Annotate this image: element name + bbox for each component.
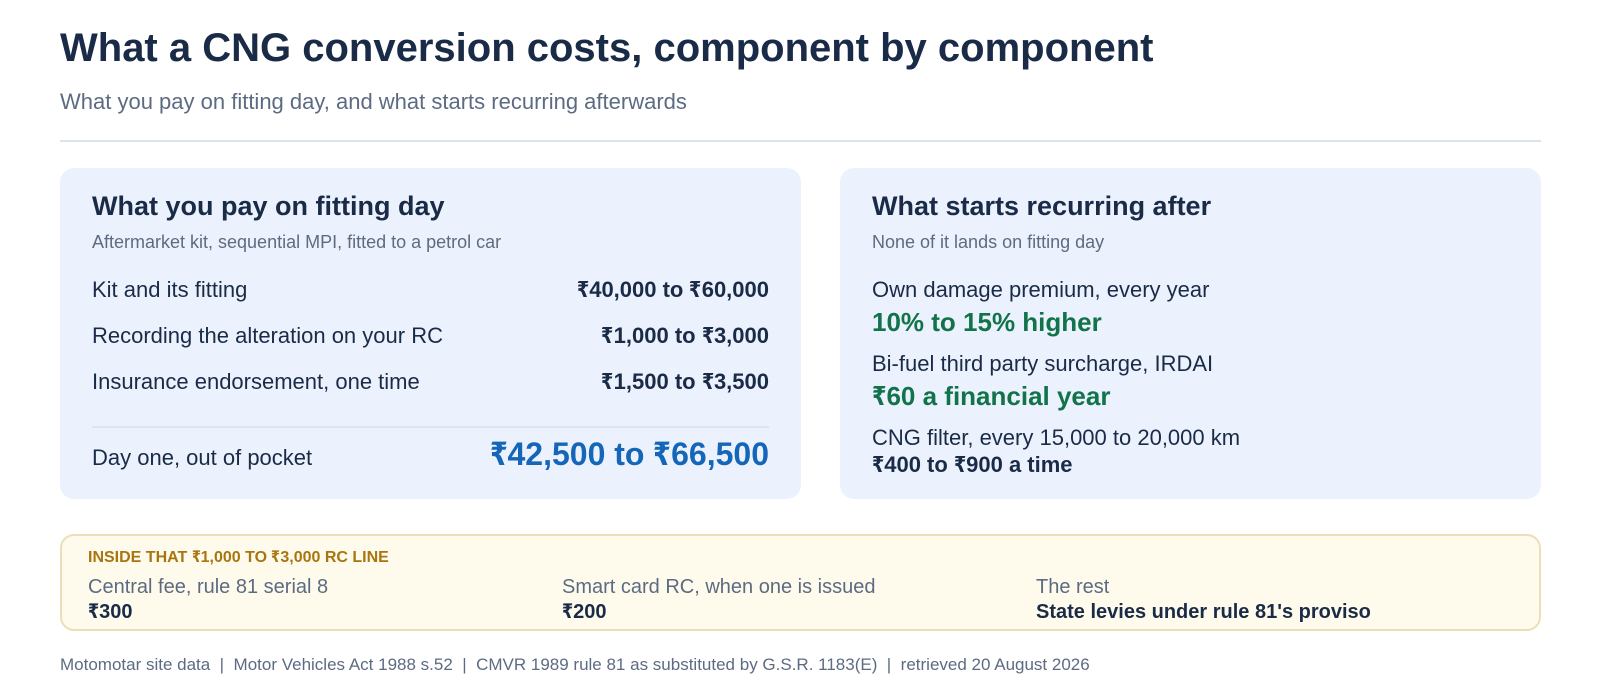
callout item: smart card: ₹ [562, 601, 573, 623]
callout item: the rest: The rest [1036, 576, 1109, 598]
callout item: central fee: Central fee, rule 81 serial 8 [88, 576, 328, 598]
callout item: central fee: ₹ [88, 601, 99, 623]
cost row: insurance endorsement: ₹ [702, 369, 714, 394]
recurring item: third party surcharge: 60 a financial year [886, 381, 1110, 411]
panel: fitting day costs [60, 168, 801, 499]
cost row: kit and fitting [92, 277, 769, 302]
callout: RC line breakdown [60, 534, 1541, 631]
callout heading: ₹ [271, 549, 280, 566]
cost row: kit and fitting: Kit and its fitting [92, 277, 247, 302]
recurring item: own damage premium [872, 277, 1210, 337]
cost row: insurance endorsement: Insurance endorsement, one time [92, 369, 420, 394]
recurring item: third party surcharge: ₹ [872, 381, 886, 411]
callout item: the rest [1036, 576, 1371, 623]
recurring item: third party surcharge [872, 351, 1213, 411]
cost row: kit and fitting: ₹ [689, 277, 702, 302]
total row: day one out of pocket: 42,500 to 66,500 [507, 436, 769, 472]
cost row: kit and fitting: ₹ [577, 277, 589, 302]
callout item: the rest: State levies under rule 81's proviso [1036, 601, 1371, 623]
cost row: kit and fitting: 40,000 to 60,000 [589, 277, 769, 302]
cost row: RC alteration: ₹ [702, 323, 714, 348]
recurring item: CNG filter: CNG filter, every 15,000 to 20,000 km [872, 425, 1240, 450]
cost row: RC alteration: ₹ [601, 323, 614, 348]
total row: day one out of pocket: Day one, out of pocket [92, 445, 312, 470]
recurring item: third party surcharge: Bi-fuel third party surcharge, IRDAI [872, 351, 1213, 376]
callout heading: ₹ [192, 549, 201, 566]
callout item: smart card: 200 [573, 601, 606, 623]
cost row: insurance endorsement: 1,500 to 3,500 [614, 369, 769, 394]
total row: day one out of pocket: ₹ [653, 436, 671, 472]
callout heading: INSIDE THAT 1,000 TO 3,000 RC LINE [88, 549, 389, 566]
cost row: RC alteration: 1,000 to 3,000 [614, 323, 769, 348]
callout item: smart card: Smart card RC, when one is issued [562, 576, 875, 598]
callout item: central fee: 300 [99, 601, 132, 623]
callout item: central fee [88, 576, 328, 623]
callout item: smart card [562, 576, 875, 623]
source footnote: Motomotar site data | Motor Vehicles Act 1988 s.52 | CMVR 1989 rule 81 as substituted by G.S.R. 1183(E) | retrieved 20 August 2026 [60, 655, 1090, 674]
panel subheading: fitting day: Aftermarket kit, sequential MPI, fitted to a petrol car [92, 232, 501, 252]
recurring item: own damage premium: 10% to 15% higher [872, 307, 1102, 337]
cost row: insurance endorsement: ₹ [601, 369, 614, 394]
cost row: insurance endorsement [92, 369, 769, 394]
cost row: RC alteration: Recording the alteration on your RC [92, 323, 443, 348]
panel subheading: recurring: None of it lands on fitting day [872, 232, 1104, 252]
total row: day one out of pocket [92, 436, 769, 472]
subtitle: What you pay on fitting day, and what starts recurring afterwards [60, 89, 687, 114]
recurring item: CNG filter [872, 425, 1240, 477]
cost row: RC alteration [92, 323, 769, 348]
total row: day one out of pocket: ₹ [490, 436, 508, 472]
recurring item: CNG filter: 400 to 900 a time [884, 452, 1073, 477]
panel heading: fitting day: What you pay on fitting day [92, 191, 444, 221]
recurring item: CNG filter: ₹ [872, 452, 884, 477]
panel: recurring costs [840, 168, 1541, 499]
recurring item: CNG filter: ₹ [954, 452, 966, 477]
panel heading: recurring: What starts recurring after [872, 191, 1211, 221]
recurring item: own damage premium: Own damage premium, every year [872, 277, 1209, 302]
title: What a CNG conversion costs, component by component [60, 26, 1153, 70]
